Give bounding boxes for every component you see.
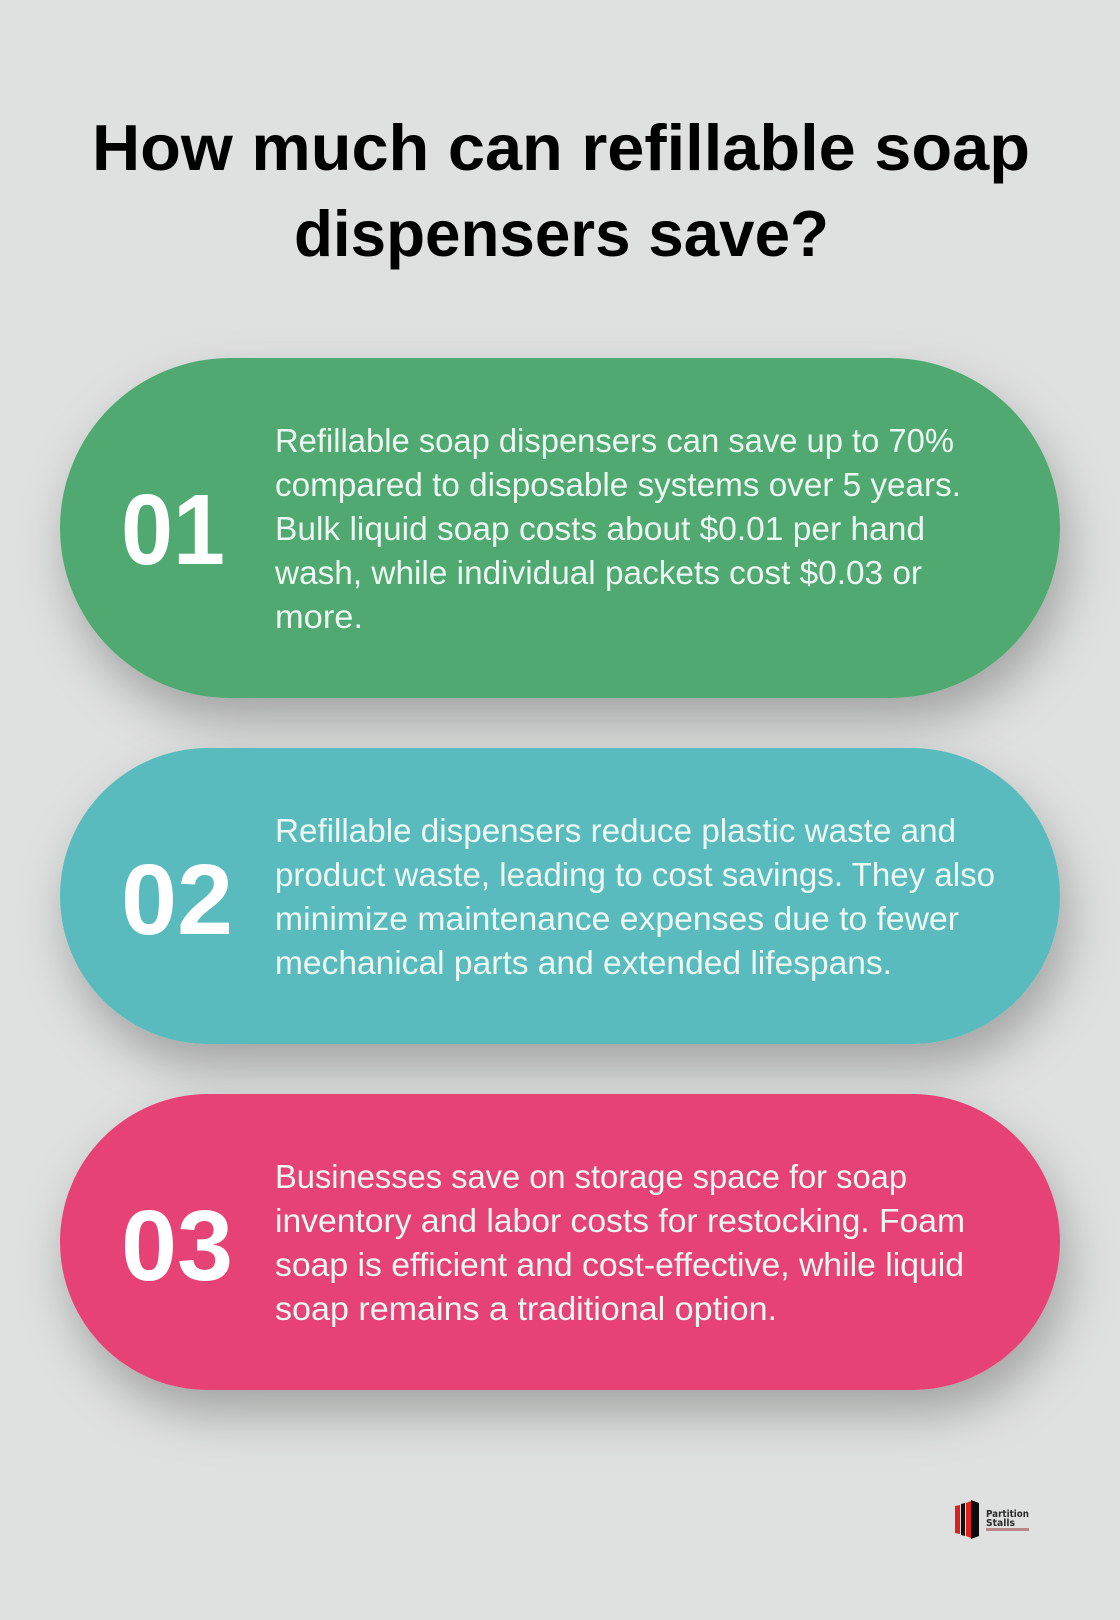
number 01: 01 xyxy=(121,474,225,586)
text block 03: inventory and labor costs for restocking. Foam xyxy=(275,1202,965,1239)
text block 02: minimize maintenance expenses due to fewer xyxy=(275,900,959,937)
text block 02: product waste, leading to cost savings. They also xyxy=(275,856,995,893)
text block 01: Bulk liquid soap costs about $0.01 per hand xyxy=(275,510,925,547)
panel: step 01 xyxy=(60,358,1060,698)
icon: partition bars xyxy=(955,1500,979,1539)
text block 01: compared to disposable systems over 5 years. xyxy=(275,466,961,503)
number 03: 03 xyxy=(121,1190,233,1302)
text block 03 xyxy=(275,1158,965,1327)
text block 01: wash, while individual packets cost $0.03 or xyxy=(274,554,922,591)
title: dispensers save? xyxy=(294,197,829,270)
panel: step 03 xyxy=(60,1094,1060,1390)
text block 01: more. xyxy=(275,598,363,635)
logo wordmark: Stalls xyxy=(986,1518,1015,1529)
pill background green xyxy=(60,358,1060,698)
text block 03: soap is efficient and cost-effective, while liquid xyxy=(275,1246,964,1283)
text block 02: Refillable dispensers reduce plastic waste and xyxy=(275,812,956,849)
panel: step 02 xyxy=(60,748,1060,1044)
text block 01: Refillable soap dispensers can save up to 70% xyxy=(275,422,954,459)
title: How much can refillable soap xyxy=(92,111,1030,184)
logo wordmark: Partition xyxy=(986,1509,1029,1520)
text block 02 xyxy=(275,812,995,981)
number 02: 02 xyxy=(121,844,233,956)
text block 01 xyxy=(274,422,961,635)
logo: Partition Stalls xyxy=(955,1500,1029,1539)
text block 03: soap remains a traditional option. xyxy=(275,1290,777,1327)
text block 03: Businesses save on storage space for soap xyxy=(275,1158,907,1195)
pill background teal xyxy=(60,748,1060,1044)
title xyxy=(92,111,1030,270)
logo wordmark xyxy=(986,1509,1029,1531)
pill background pink xyxy=(60,1094,1060,1390)
text block 02: mechanical parts and extended lifespans. xyxy=(275,944,892,981)
